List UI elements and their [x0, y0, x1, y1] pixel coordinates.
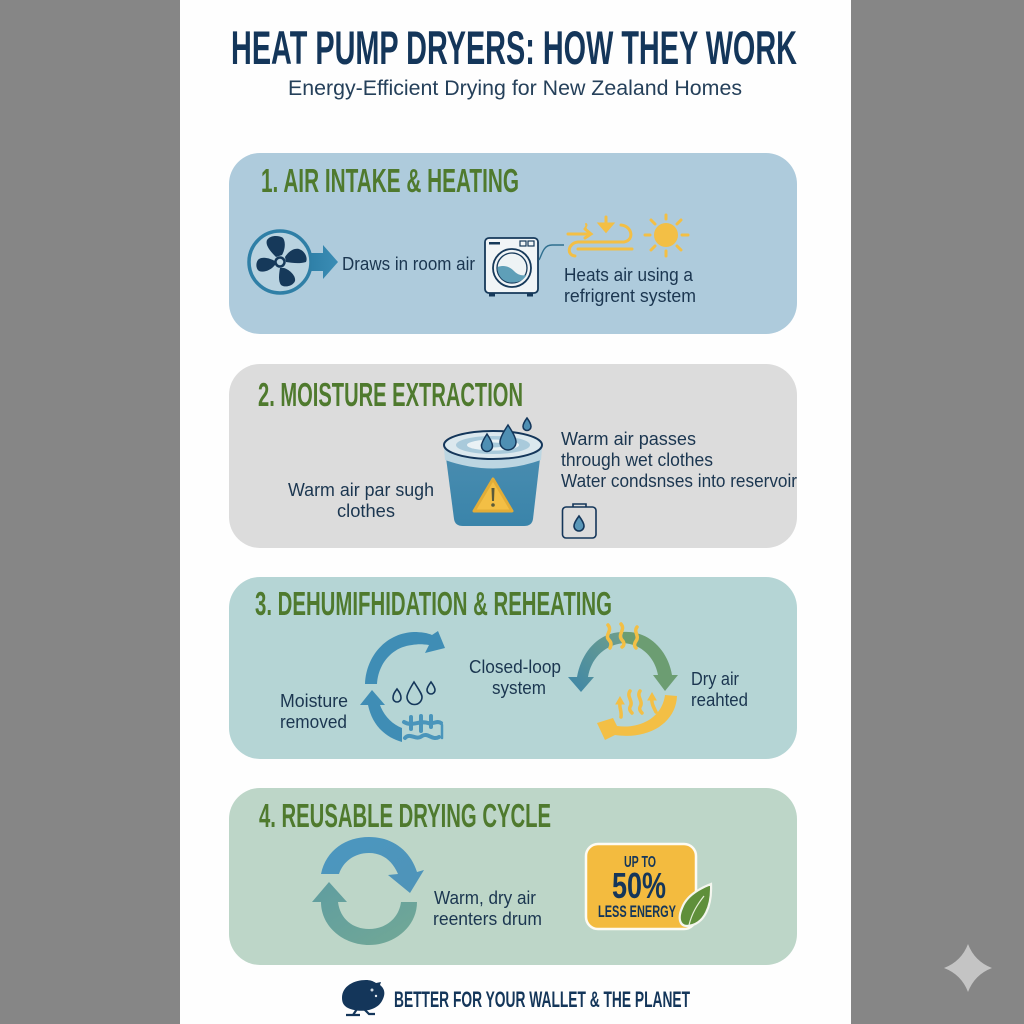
text: moisture removed: Moisture — [280, 690, 348, 711]
heading: step 2: 2. MOISTURE EXTRACTION — [258, 376, 523, 413]
panel: 2 moisture extraction — [229, 364, 797, 548]
panel: 3 dehumidification and reheating — [229, 577, 797, 759]
white poster sheet — [180, 0, 851, 1024]
heading: step 1: 1. AIR INTAKE & HEATING — [261, 162, 519, 199]
text: draws in room air: Draws in room air — [342, 253, 475, 274]
footer icon: kiwi bird — [342, 980, 384, 1015]
icon: leaf — [680, 884, 711, 926]
heat waves — [607, 624, 656, 717]
water drops — [482, 418, 531, 452]
warning triangle — [474, 479, 512, 511]
icon: moisture removal loop — [360, 631, 445, 742]
heading: step 3: 3. DEHUMIFHIDATION & REHEATING — [255, 585, 612, 622]
icon: dryer — [485, 238, 538, 296]
text: closed-loop system: system — [492, 677, 546, 698]
text: closed-loop system — [469, 656, 561, 698]
text: moisture removed: removed — [280, 711, 347, 732]
arrow: air into dryer — [311, 245, 338, 279]
icon: recycling arrows — [312, 837, 424, 945]
text: dry air reheated: Dry air — [691, 668, 739, 689]
text: heats air: refrigrent system — [564, 285, 696, 306]
text: dry air reheated: reahted — [691, 689, 748, 710]
panel: 4 reusable drying cycle — [229, 788, 797, 965]
text: heats air — [564, 264, 696, 306]
icon: sparkle watermark — [944, 944, 992, 992]
icon: warm air waves — [568, 217, 632, 256]
badge: up to 50% less energy: LESS ENERGY — [598, 903, 676, 921]
icon: reheating loop — [568, 624, 678, 740]
badge: up to 50% less energy: 50% — [612, 865, 666, 906]
text: warm air right: Warm air passes — [561, 428, 696, 449]
text: dry air reheated — [691, 668, 748, 710]
text: warm dry air: reenters drum — [433, 908, 542, 929]
connector line — [539, 245, 564, 260]
heading: step 4: 4. REUSABLE DRYING CYCLE — [259, 797, 551, 834]
text: warm air right — [561, 428, 797, 491]
badge: up to 50% less energy — [586, 844, 711, 929]
condenser coil — [404, 716, 442, 738]
icon: fan — [249, 231, 311, 293]
text: heats air: Heats air using a — [564, 264, 694, 285]
subtitle: Energy-Efficient Drying for New Zealand Homes — [288, 76, 742, 100]
text: moisture removed — [280, 690, 348, 732]
moisture drops — [393, 682, 435, 705]
badge: up to 50% less energy: UP TO — [624, 854, 656, 871]
text: warm air left — [288, 479, 434, 521]
icon: water bucket with warning — [444, 418, 542, 526]
text: warm air left: Warm air par sugh — [288, 479, 434, 500]
icon: sun — [645, 215, 688, 256]
text: closed-loop system: Closed-loop — [469, 656, 561, 677]
text: warm dry air — [433, 887, 542, 929]
icon: reservoir tank — [562, 504, 596, 538]
panel: 1 air intake and heating — [229, 153, 797, 334]
text: warm air right: Water condsnses into reservoir — [561, 470, 797, 491]
text: warm air left: clothes — [337, 500, 395, 521]
footer text: BETTER FOR YOUR WALLET & THE PLANET — [394, 987, 690, 1012]
text: warm dry air: Warm, dry air — [434, 887, 536, 908]
text: warm air right: through wet clothes — [561, 449, 713, 470]
